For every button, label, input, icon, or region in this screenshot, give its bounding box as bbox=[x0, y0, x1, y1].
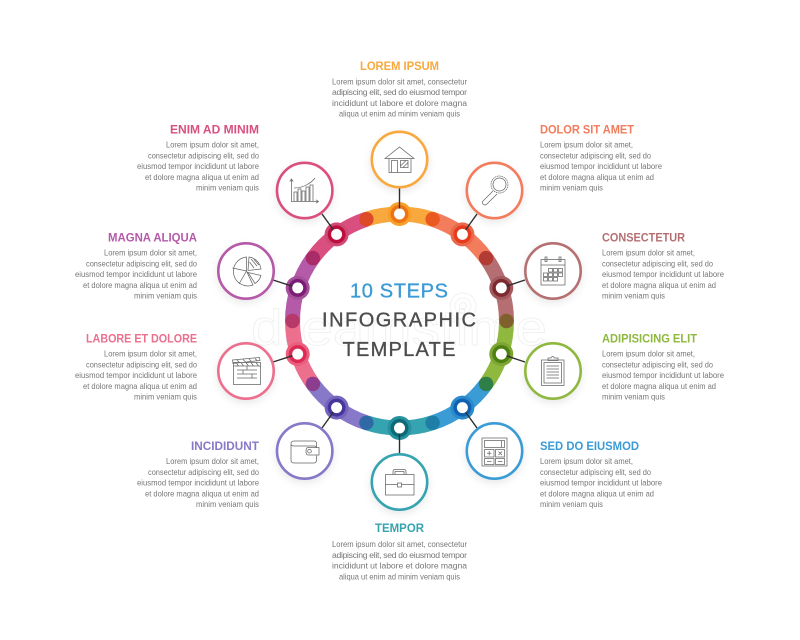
text block: Consectetur: consectetur adipiscing elit, sed do bbox=[602, 258, 713, 268]
text block: Consectetur: minim veniam quis bbox=[602, 290, 665, 300]
text block: Adipisicing Elit: minim veniam quis bbox=[602, 392, 665, 402]
text block: Sed Do Eiusmod: consectetur adipiscing elit, sed do bbox=[540, 467, 651, 477]
text block: Incididunt: minim veniam quis bbox=[196, 499, 259, 509]
title bbox=[322, 280, 476, 361]
text block: Tempor: aliqua ut enim ad minim veniam quis bbox=[339, 571, 460, 581]
text block: Tempor: adipiscing elit, sed do eiusmod tempor bbox=[332, 550, 467, 560]
text block: Dolor Sit Amet: DOLOR SIT AMET bbox=[540, 124, 634, 136]
text block: Lorem Ipsum: LOREM IPSUM bbox=[360, 61, 439, 73]
text block: Consectetur: et dolore magna aliqua ut enim ad bbox=[602, 280, 716, 290]
text block: Magna Aliqua: et dolore magna aliqua ut enim ad bbox=[83, 280, 197, 290]
icon: clipboard bbox=[525, 343, 581, 399]
text block: Labore et Dolore: consectetur adipiscing elit, sed do bbox=[86, 359, 197, 369]
text block: Magna Aliqua: eiusmod tempor incididunt ut labore bbox=[75, 269, 197, 279]
icon: wallet bbox=[277, 423, 332, 479]
text block: Incididunt: INCIDIDUNT bbox=[191, 441, 259, 453]
title: TEMPLATE bbox=[342, 339, 456, 361]
text block: Tempor: TEMPOR bbox=[375, 523, 425, 535]
text block: Dolor Sit Amet bbox=[540, 124, 662, 192]
text block: Enim ad Minim bbox=[137, 124, 259, 192]
icon: line chart bbox=[277, 163, 332, 218]
text block: Dolor Sit Amet: eiusmod tempor incididunt ut labore bbox=[540, 161, 662, 171]
ring: node halos bbox=[286, 202, 513, 440]
text block: Magna Aliqua: minim veniam quis bbox=[134, 290, 197, 300]
text block: Lorem Ipsum: adipiscing elit, sed do eiusmod tempor bbox=[332, 87, 467, 97]
title: INFOGRAPHIC bbox=[322, 310, 476, 332]
text block: Dolor Sit Amet: consectetur adipiscing elit, sed do bbox=[540, 150, 651, 160]
text block: Labore et Dolore: LABORE ET DOLORE bbox=[86, 334, 197, 346]
text block: Enim ad Minim: consectetur adipiscing elit, sed do bbox=[148, 150, 259, 160]
title: 10 STEPS bbox=[350, 280, 448, 302]
text block: Adipisicing Elit: ADIPISICING ELIT bbox=[602, 334, 697, 346]
text block: Tempor bbox=[332, 523, 467, 581]
text block: Adipisicing Elit: eiusmod tempor incididunt ut labore bbox=[602, 370, 724, 380]
text block: Labore et Dolore: Lorem ipsum dolor sit amet, bbox=[104, 348, 197, 358]
text block: Tempor: Lorem ipsum dolor sit amet, consectetur bbox=[332, 539, 467, 549]
text block: Enim ad Minim: minim veniam quis bbox=[196, 182, 259, 192]
text block: Incididunt: et dolore magna aliqua ut enim ad bbox=[145, 488, 259, 498]
text block: Enim ad Minim: Lorem ipsum dolor sit amet, bbox=[166, 140, 259, 150]
text block: Incididunt bbox=[137, 441, 259, 509]
text block: Labore et Dolore: eiusmod tempor incididunt ut labore bbox=[75, 370, 197, 380]
text block: Magna Aliqua: Lorem ipsum dolor sit amet, bbox=[104, 248, 197, 258]
text block: Incididunt: eiusmod tempor incididunt ut labore bbox=[137, 478, 259, 488]
text block: Sed Do Eiusmod bbox=[540, 441, 662, 509]
text block: Sed Do Eiusmod: minim veniam quis bbox=[540, 499, 603, 509]
text block: Consectetur: Lorem ipsum dolor sit amet, bbox=[602, 248, 695, 258]
icon: calculator bbox=[467, 423, 522, 479]
text block: Sed Do Eiusmod: Lorem ipsum dolor sit amet, bbox=[540, 456, 633, 466]
text block: Enim ad Minim: eiusmod tempor incididunt ut labore bbox=[137, 161, 259, 171]
text block: Magna Aliqua: consectetur adipiscing elit, sed do bbox=[86, 258, 197, 268]
text block: Tempor: incididunt ut labore et dolore magna bbox=[332, 560, 467, 570]
text block: Dolor Sit Amet: et dolore magna aliqua ut enim ad bbox=[540, 172, 654, 182]
text block: Sed Do Eiusmod: et dolore magna aliqua ut enim ad bbox=[540, 488, 654, 498]
text block: Enim ad Minim: et dolore magna aliqua ut enim ad bbox=[145, 172, 259, 182]
text block: Enim ad Minim: ENIM AD MINIM bbox=[170, 124, 259, 136]
text block: Lorem Ipsum: Lorem ipsum dolor sit amet, consectetur bbox=[332, 76, 467, 86]
text block: Sed Do Eiusmod: eiusmod tempor incididunt ut labore bbox=[540, 478, 662, 488]
text block: Lorem Ipsum bbox=[332, 61, 467, 118]
text block: Magna Aliqua bbox=[75, 232, 197, 300]
ring: ten coloured segments bbox=[292, 214, 507, 428]
text block: Dolor Sit Amet: minim veniam quis bbox=[540, 182, 603, 192]
icon: clapperboard bbox=[218, 343, 274, 399]
icon: house bbox=[372, 132, 427, 187]
text block: Dolor Sit Amet: Lorem ipsum dolor sit amet, bbox=[540, 140, 633, 150]
watermark: dreamstime bbox=[251, 300, 547, 356]
text block: Magna Aliqua: MAGNA ALIQUA bbox=[108, 232, 197, 244]
connector lines bbox=[273, 188, 525, 454]
text block: Labore et Dolore: et dolore magna aliqua ut enim ad bbox=[83, 381, 197, 391]
text block: Incididunt: Lorem ipsum dolor sit amet, bbox=[166, 456, 259, 466]
text block: Consectetur: CONSECTETUR bbox=[602, 232, 686, 244]
text block: Consectetur bbox=[602, 232, 724, 300]
text block: Sed Do Eiusmod: SED DO EIUSMOD bbox=[540, 441, 639, 453]
text block: Adipisicing Elit bbox=[602, 334, 724, 402]
text block: Adipisicing Elit: consectetur adipiscing elit, sed do bbox=[602, 359, 713, 369]
icon: briefcase bbox=[372, 454, 427, 510]
text block: Lorem Ipsum: aliqua ut enim ad minim veniam quis bbox=[339, 108, 460, 118]
text block: Adipisicing Elit: et dolore magna aliqua ut enim ad bbox=[602, 381, 716, 391]
icon: calendar bbox=[525, 243, 581, 299]
icon: magnifier bbox=[467, 163, 522, 218]
text block: Consectetur: eiusmod tempor incididunt ut labore bbox=[602, 269, 724, 279]
ring: white node centres bbox=[292, 208, 507, 434]
icon: pie chart bbox=[218, 243, 274, 299]
ring: overlap dots between segments bbox=[285, 212, 514, 430]
text block: Labore et Dolore: minim veniam quis bbox=[134, 392, 197, 402]
text block: Lorem Ipsum: incididunt ut labore et dolore magna bbox=[332, 98, 467, 108]
text block: Incididunt: consectetur adipiscing elit, sed do bbox=[148, 467, 259, 477]
text block: Labore et Dolore bbox=[75, 334, 197, 402]
text block: Adipisicing Elit: Lorem ipsum dolor sit amet, bbox=[602, 348, 695, 358]
